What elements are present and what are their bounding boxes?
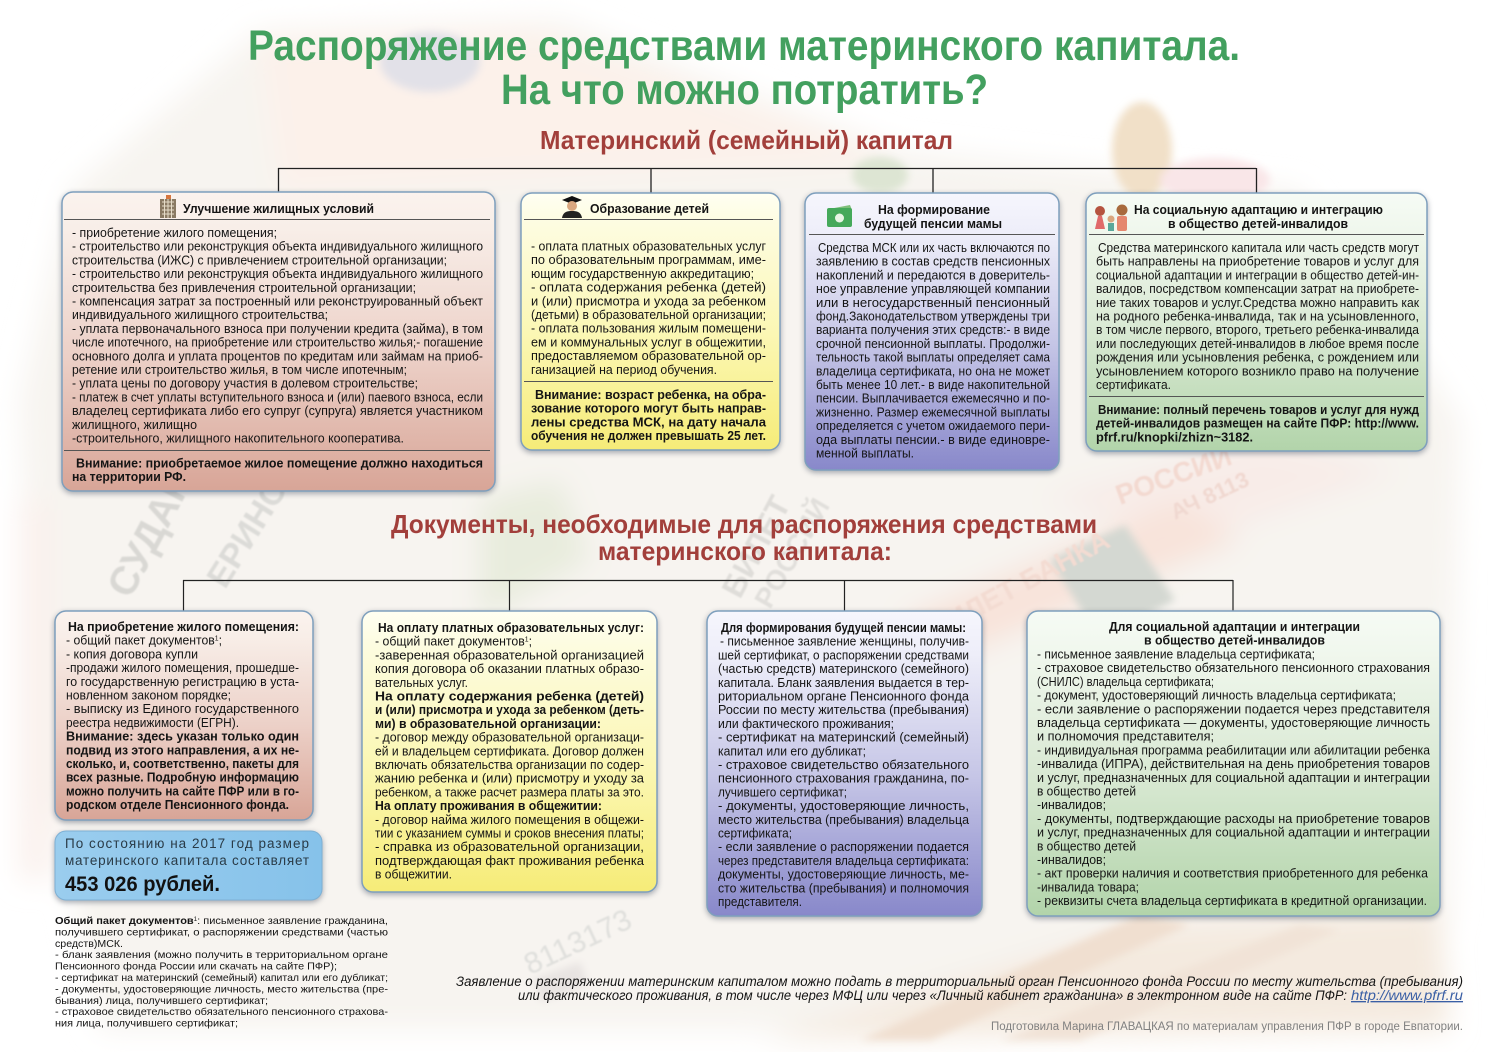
panel: pension [805,193,1059,470]
text block: housing documents: - копия договора купли [66,647,198,661]
text block: housing documents: реестра недвижимости (ЕГРН). [66,716,239,730]
text block: social adaptation documents: в общество детей [1037,784,1136,798]
text block: where to apply: Заявление о распоряжении материнским капиталом можно подать в территориальный орган Пенсионного фонда России по месту жительства (пребывания) [456,974,1463,989]
callout: housing documents notice: всех разные. Подробную информацию [66,771,299,785]
text block: pension documents: или фактического проживания; [718,717,894,731]
background: faded banknotes: 8113173 [519,903,637,981]
callout: housing notice: на территории РФ. [72,470,186,484]
text block: pension: менной выплаты. [816,446,914,460]
text block: social adaptation: сертификата. [1096,378,1171,392]
heading: social adaptation [1134,203,1383,231]
title: Распоряжение средствами материнского капитала. [248,22,1240,70]
background: faded banknotes: ЕРИНСКИЙ [199,414,332,594]
callout: social adaptation notice: pfrf.ru/knopki/zhizn~3182. [1096,430,1253,444]
text block: housing documents: - общий пакет документов [66,634,219,648]
text block: education documents: жанию ребенка и (или) присмотру и уходу за [375,772,644,786]
text block: pension documents [718,635,969,909]
panel: education documents [362,611,657,892]
text block: social adaptation: быть направлены на приобретение товаров и услуг для [1096,255,1419,269]
text block: education documents: в общежитии. [375,868,452,882]
text block: pension: пенсии. Выплачивается ежемесячно и по- [816,392,1050,406]
text block: education list: - оплата платных образовательных услуг [531,240,766,254]
text block: pension: заявлению в состав средств пенсионных [816,255,1051,269]
icon: graduate [562,196,582,218]
text block: social adaptation documents: и услуг, предназначенных для социальной адаптации и интеграции [1037,771,1430,785]
text block: pension documents: (частью средств) материнского (семейного) [718,662,969,676]
text block: pension documents: пенсионного страхования гражданина, по- [718,772,969,786]
text block: social adaptation: в том числе первого, второго, третьего ребенка-инвалида [1096,323,1419,337]
callout: housing documents notice: сколько, и, соответственно, пакеты для [66,757,299,771]
text block: education documents: подтверждающая факт проживания ребенка [375,854,644,868]
callout: social adaptation notice: Внимание: полный перечень товаров и услуг для нужд [1098,403,1419,417]
text block: education documents: - договор между образовательной организаци- [375,731,644,745]
text block: education list: ганизацией на период обучения. [531,363,717,377]
text block: social adaptation: ние таких товаров и услуг.Средства можно направить как [1096,296,1419,310]
callout: social adaptation notice: детей-инвалидов размещен на сайте ПФР: http://www. [1096,417,1419,431]
text block: pension: ода выплаты пенсии.- в виде единовре- [816,433,1050,447]
text block: housing list: - компенсация затрат за построенный или реконструированный объект [72,294,483,308]
text block: common document package [55,915,389,1030]
text block: where to apply [456,974,1464,1003]
text block: common document package: 1 [194,917,198,923]
text block: pension documents: риториальном органе Пенсионного фонда [718,690,969,704]
text block: housing list: ретение или строительство жилья, в том числе ипотечным; [72,363,407,377]
credit line: Подготовила Марина ГЛАВАЦКАЯ по материалам управления ПФР в городе Евпатории. [991,1021,1463,1033]
text block: social adaptation documents: - реквизиты счета владельца сертификата в кредитной организации. [1037,894,1427,908]
text block: education documents: ей и владельцем сертификата. Договор должен [375,744,644,758]
text block: social adaptation documents: владельца сертификата — документы, удостоверяющие личность [1037,716,1430,730]
text block: pension: владелица сертификата, но она не может [816,364,1050,378]
text block: pension documents: документы, удостоверяющие личность, ме- [718,868,969,882]
background: faded banknotes: СУДАРСТВ [99,393,239,604]
background: faded banknotes: АЧ 8113 [1167,467,1253,525]
text block: common document package: : письменное заявление гражданина, [197,915,388,927]
text block: social adaptation documents: и полномочия представителя; [1037,730,1214,744]
text block: education list: и (или) присмотра и ухода за ребенком [531,294,766,308]
text block: social adaptation documents: -инвалидов; [1037,798,1106,812]
text block: housing documents: ; [219,634,222,648]
text block: education list: - оплата содержания ребенка (детей) [531,281,766,295]
text block: education list: ем и коммунальных услуг в общежитии, [531,335,766,349]
text block: common document package: получившего сертификат, о распоряжении средствами (частью [55,926,388,938]
heading: social adaptation documents: в общество детей-инвалидов [1144,634,1325,648]
text block: pension: фонд.Законодательством утверждены три [816,310,1050,324]
text block: education documents: и (или) присмотра и ухода за ребенком (деть- [375,703,644,717]
text block: housing documents [66,634,299,730]
callout: housing notice [72,456,483,484]
background: faded banknotes: БИЛЕТ БАНКА [923,524,1115,645]
text block: education documents: - общий пакет документов [375,635,528,649]
title: На что можно потратить? [501,66,988,114]
text block: social adaptation documents: -инвалида (ИПРА), действительная на день приобретения товаров [1037,757,1430,771]
text block: social adaptation: рождения или усыновления ребенка, с рождением или [1096,351,1419,365]
text block: pension documents: сертификата; [718,826,792,840]
text block: social adaptation documents: - индивидуальная программа реабилитации или абилитации ребенка [1037,743,1430,757]
text block: pension documents: через представителя владельца сертификата: [718,854,969,868]
text block: social adaptation documents: - акт проверки наличия и соответствия приобретенного для ребенка [1037,867,1428,881]
text block: pension documents: - если заявление о распоряжении подается [718,840,969,854]
text block: housing list: - приобретение жилого помещения; [72,226,277,240]
text block: social adaptation documents [1037,648,1430,908]
callout: capital amount: материнского капитала составляет [65,853,309,868]
text block: pension: определяется с учетом ожидаемого пери- [816,419,1050,433]
text block: education documents: ; [529,635,532,649]
text block: social adaptation: социальной адаптации и интеграции в общество детей-ин- [1096,268,1419,282]
title [248,22,1240,114]
text block: education list: предоставляемом образовательной ор- [531,349,766,363]
callout: education notice: Внимание: возраст ребенка, на обра- [535,388,766,402]
text block: education list: (детьми) в образовательной организации; [531,308,766,322]
text block: pension documents: шей сертификат, о распоряжении средствами [718,648,969,662]
text block: housing documents: го государственную регистрацию в уста- [66,675,299,689]
callout: education notice [531,388,767,443]
connector tree: directions [278,168,1256,193]
text block: pension documents: России по месту жительства (пребывания) [718,703,969,717]
text block: housing list: - уплата первоначального взноса при получении кредита (займа), в том [72,322,483,336]
heading: maternity capital: Материнский (семейный) капитал [540,125,953,155]
text block: where to apply: или фактического проживания, в том числе через МФЦ или через «Личный кабинет гражданина» в электронном виде на сайте ПФР: [518,988,1347,1003]
text block: housing list: - строительство или реконструкция объекта индивидуального жилищного [72,267,483,281]
text block: social adaptation: Средства материнского капитала или часть средств могут [1098,241,1419,255]
heading: documents: материнского капитала: [598,536,892,566]
text block: common document package: Общий пакет документов [55,915,194,927]
icon: family [1095,204,1128,231]
text block: education documents: На оплату содержания ребенка (детей) [375,690,644,704]
text block: pension: накоплений и передаются в доверитель- [816,268,1050,282]
text block: social adaptation documents: - документ, удостоверяющий личность владельца сертификата; [1037,689,1396,703]
callout: capital amount [55,831,322,900]
callout: education notice: обучения не должен превышать 25 лет. [531,429,766,443]
text block: housing documents: - выписку из Единого государственного [66,702,299,716]
text block: pension: быть менее 10 лет.- в виде накопительной [816,378,1050,392]
text block: housing list: - платеж в счет уплаты вступительного взноса и (или) паевого взноса, если [72,390,483,404]
text block: pension documents: - сертификат на материнский (семейный) [718,731,969,745]
text block: social adaptation documents: -инвалида товара; [1037,880,1139,894]
panel: housing [62,192,495,491]
text block: housing list: строительства без привлечения строительной организации; [72,281,416,295]
text block: pension documents: лучившего сертификат; [718,785,847,799]
text block: common document package: - сертификат на материнский (семейный) капитал или его дубликат; [55,972,388,984]
text block: pension documents: капитал или его дубликат; [718,744,866,758]
text block: social adaptation documents: и услуг, предназначенных для социальной адаптации и интеграции [1037,826,1430,840]
text block: housing list [72,226,483,446]
heading: social adaptation: На социальную адаптацию и интеграцию [1134,203,1383,217]
heading: housing documents: На приобретение жилого помещения: [68,620,299,634]
icon: money [827,205,852,227]
text block: pension documents: - документы, удостоверяющие личность, [718,799,969,813]
panel: social adaptation documents [1027,611,1440,916]
heading: documents: Документы, необходимые для распоряжения средствами [391,509,1097,539]
callout: capital amount: По состоянию на 2017 год размер [65,836,309,851]
panel: pension documents [707,611,982,916]
text block: where to apply: http://www.pfrf.ru [1351,988,1464,1003]
callout: housing documents notice [66,730,299,812]
panel: education [521,193,780,450]
text block: education documents: -заверенная образовательной организацией [375,648,644,662]
text block: education list [531,240,766,377]
text block: housing list: - строительство или реконструкция объекта индивидуального жилищного [72,240,483,254]
text block: pension documents: капитала. Бланк заявления выдается в тер- [718,676,969,690]
callout: education notice: лены средства МСК, на дату начала [531,415,767,429]
callout: housing notice: Внимание: приобретаемое жилое помещение должно находиться [76,456,483,470]
text block: common document package: бывания) лица, получившего сертификат; [55,995,268,1007]
text block: social adaptation documents: - если заявление о распоряжении подается через представителя [1037,702,1430,716]
text block: pension documents: - письменное заявление женщины, получив- [720,635,969,649]
text block: common document package: - страховое свидетельство обязательного пенсионного страхова- [55,1006,389,1018]
connector tree: documents [183,580,1233,611]
text block: pension: варианта получения этих средств:- в виде [816,323,1050,337]
text block: pension documents: сто жительства (пребывания) и полномочия [718,881,969,895]
text block: housing documents: -продажи жилого помещения, прошедше- [66,661,299,675]
heading: social adaptation documents: Для социальной адаптации и интеграции [1109,620,1360,634]
text block: housing list: владелец сертификата либо его супруг (супруга) является участником [72,404,483,418]
text block: education list: по образовательным программам, име- [531,253,766,267]
text block: pension: Средства МСК или их часть включаются по [818,241,1050,255]
heading: social adaptation: в общество детей-инвалидов [1168,217,1348,231]
heading: pension: будущей пенсии мамы [864,217,1002,231]
callout: education notice: зование которого могут быть направ- [531,402,766,416]
text block: housing documents: новленном законом порядке; [66,688,231,702]
text block: social adaptation documents: (СНИЛС) владельца сертификата; [1037,675,1214,689]
text block: common document package: средств)МСК. [55,938,123,950]
text block: common document package: Пенсионного фонда России или скачать на сайте ПФР); [55,961,337,973]
text block: social adaptation documents: - документы, подтверждающие расходы на приобретение товаров [1037,812,1430,826]
text block: education documents: - справка из образовательной организации, [375,840,644,854]
heading: social adaptation documents [1109,620,1360,648]
text block: social adaptation [1096,241,1419,392]
heading: education: Образование детей [590,201,709,216]
text block: education documents: ребенком, а также расчет размера платы за это. [375,785,644,799]
text block: pension: жизненно. Размер ежемесячной выплаты [816,405,1050,419]
text block: education documents: вательных услуг. [375,676,468,690]
text block: housing list: - уплата цены по договору участия в долевом строительстве; [72,377,418,391]
text block: pension: тельность такой выплаты определяет сама [816,351,1050,365]
text block: pension: или в негосударственный пенсионный [816,296,1050,310]
background: faded banknotes: БИЛЕТ [714,489,798,603]
text block: social adaptation documents: - страховое свидетельство обязательного пенсионного страхования [1037,661,1430,675]
callout: housing documents notice: Внимание: здесь указан только один [66,730,299,744]
text block: pension documents: место жительства (пребывания) владельца [718,813,969,827]
text block: education documents: ми) в образовательной организации: [375,717,601,731]
heading: pension: На формирование [878,203,990,217]
text block: education list: ющим государственную аккредитацию; [531,267,754,281]
text block: common document package: ния лица, получившего сертификат; [55,1018,238,1030]
text block: housing list: числе ипотечного, на приобретение или строительство жилья;- погашение [72,336,483,350]
text block: education documents: включать обязательства организации по содер- [375,758,644,772]
panel: social adaptation [1086,193,1427,451]
text block: education list: - оплата пользования жилым помещени- [531,322,766,336]
heading: documents [391,509,1097,566]
text block: housing list: основного долга и уплата процентов по кредитам или займам на приоб- [72,349,483,363]
callout: housing documents notice: подвид из этого направления, а их не- [66,743,299,757]
text block: pension [816,241,1051,460]
background: faded banknotes: РОССИЙ [747,492,836,613]
text block: social adaptation: или последующих детей-инвалидов в любое время после [1096,337,1419,351]
text block: social adaptation: на родного ребенка-инвалида, так и на усыновленного, [1096,310,1419,324]
text block: education documents [375,635,644,882]
text block: pension documents: представителя. [718,895,802,909]
text block: pension documents: - страховое свидетельство обязательного [718,758,969,772]
text block: education documents: - договор найма жилого помещения в общежи- [375,813,644,827]
text block: common document package: - документы, удостоверяющие личность, место жительства (пре- [55,983,389,995]
text block: pension: срочной пенсионной выплаты. Продолжи- [816,337,1050,351]
heading: housing: Улучшение жилищных условий [183,201,374,216]
text block: social adaptation documents: -инвалидов; [1037,853,1106,867]
callout: capital amount: 453 026 рублей. [65,873,220,896]
text block: housing list: жилищного, жилищно [72,418,197,432]
text block: education documents: 1 [525,637,529,644]
callout: housing documents notice: родском отделе Пенсионного фонда. [66,798,289,812]
text block: pension: ное управление управляющей компании [816,282,1050,296]
heading: education documents: На оплату платных образовательных услуг: [378,621,644,635]
background: faded banknotes: РОССИИ [1111,440,1236,511]
callout: housing documents notice: можно получить на сайте ПФР или в го- [66,784,299,798]
text block: social adaptation: валидов, посредством компенсации затрат на приобрете- [1096,282,1419,296]
text block: housing documents: 1 [215,636,219,643]
text block: housing list: индивидуального жилищного строительства; [72,308,328,322]
text block: education documents: На оплату проживания в общежитии: [375,799,602,813]
text block: social adaptation documents: в общество детей [1037,839,1136,853]
text block: education documents: тии с указанием суммы и сроков внесения платы; [375,826,644,840]
text block: education documents: копия договора об оказании платных образо- [375,662,644,676]
text block: social adaptation documents: - письменное заявление владельца сертификата; [1037,648,1315,662]
text block: common document package: - бланк заявления (можно получить в территориальном органе [55,949,388,961]
panel: housing documents [55,611,313,820]
text block: social adaptation: усыновлением которого возникло право на получение [1096,364,1419,378]
callout: social adaptation notice [1096,403,1419,444]
heading: pension [864,203,1002,231]
text block: housing list: строительства (ИЖС) с привлечением строительной организации; [72,253,447,267]
icon: building [160,195,176,218]
heading: pension documents: Для формирования будущей пенсии мамы: [721,621,966,635]
text block: housing list: -строительного, жилищного накопительного кооператива. [72,432,404,446]
